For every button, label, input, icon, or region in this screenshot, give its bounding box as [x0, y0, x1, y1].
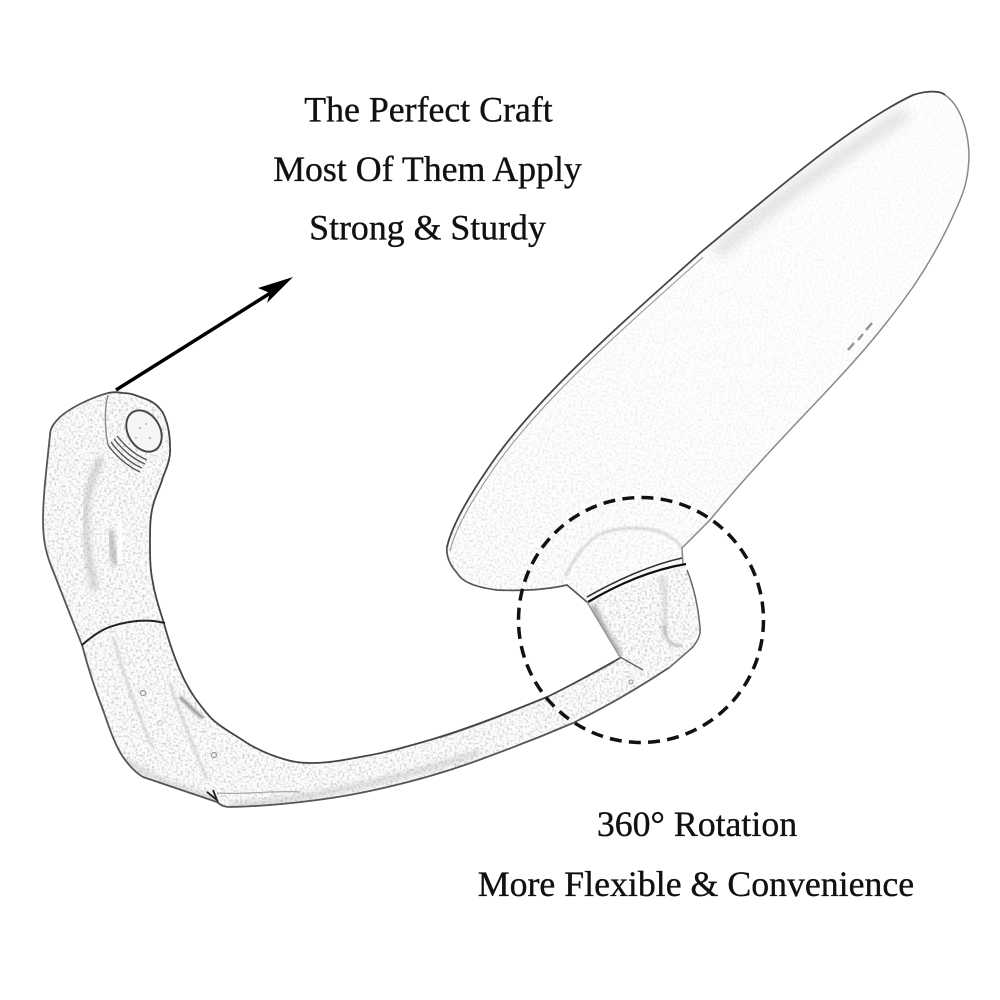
end notch [207, 790, 217, 800]
bottom callout: 360° Rotation [597, 804, 797, 844]
top callout: The Perfect Craft [304, 90, 553, 130]
swivel joint [586, 557, 701, 671]
top callout: Strong & Sturdy [309, 208, 546, 248]
mounting hub [105, 395, 169, 472]
handlebar arm [40, 385, 680, 815]
top callout [273, 90, 582, 248]
arrow [116, 277, 293, 390]
mirror head [430, 80, 980, 610]
handlebar seam [82, 621, 165, 645]
top callout: Most Of Them Apply [273, 149, 582, 189]
dashed circle [518, 498, 764, 742]
bottom callout [478, 804, 914, 904]
bottom callout: More Flexible & Convenience [478, 864, 914, 904]
